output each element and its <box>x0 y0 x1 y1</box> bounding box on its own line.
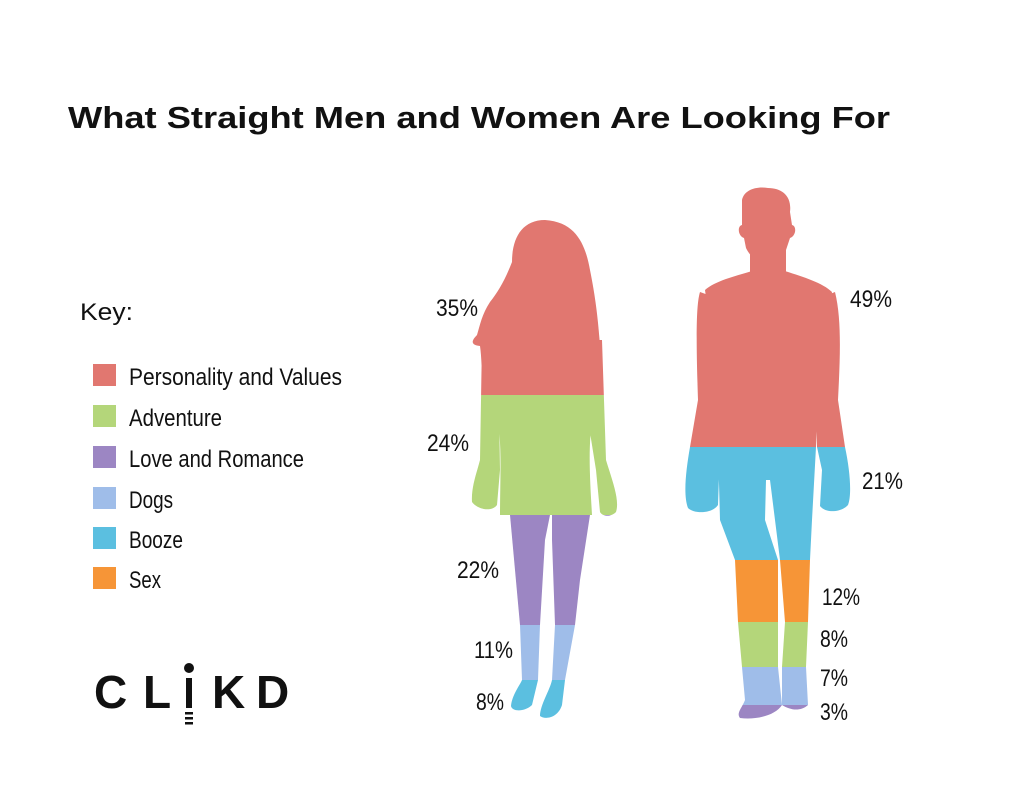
woman percentages: 22% <box>457 557 499 584</box>
figure: woman <box>472 220 618 718</box>
legend item: sex: Sex <box>129 567 161 594</box>
logo: D <box>256 666 289 718</box>
woman percentages: 24% <box>427 430 469 457</box>
legend item: love: Love and Romance <box>129 446 304 473</box>
man percentages: 21% <box>862 468 903 495</box>
man percentages: 8% <box>820 626 848 653</box>
legend heading: Key: <box>80 299 133 326</box>
man percentages: 7% <box>820 665 848 692</box>
legend item: sex <box>93 567 161 594</box>
legend item: booze <box>93 527 183 554</box>
woman percentages: 11% <box>474 637 513 664</box>
title: What Straight Men and Women Are Looking For <box>68 100 890 135</box>
man percentages <box>820 286 903 726</box>
legend item: booze: Booze <box>129 527 183 554</box>
man percentages: 49% <box>850 286 892 313</box>
legend item: adventure: Adventure <box>129 405 222 432</box>
legend item: adventure <box>93 405 222 432</box>
logo: L <box>143 666 171 718</box>
man percentages: 12% <box>822 584 860 611</box>
woman percentages: 35% <box>436 295 478 322</box>
legend item: personality: Personality and Values <box>129 364 342 391</box>
logo: C <box>94 666 127 718</box>
logo: K <box>212 666 245 718</box>
woman percentages <box>427 295 513 716</box>
logo <box>94 663 289 724</box>
legend <box>80 299 342 594</box>
man percentages: 3% <box>820 699 848 726</box>
legend item: dogs <box>93 487 173 514</box>
figure: man <box>685 188 850 718</box>
woman percentages: 8% <box>476 689 504 716</box>
legend item: dogs: Dogs <box>129 487 173 514</box>
